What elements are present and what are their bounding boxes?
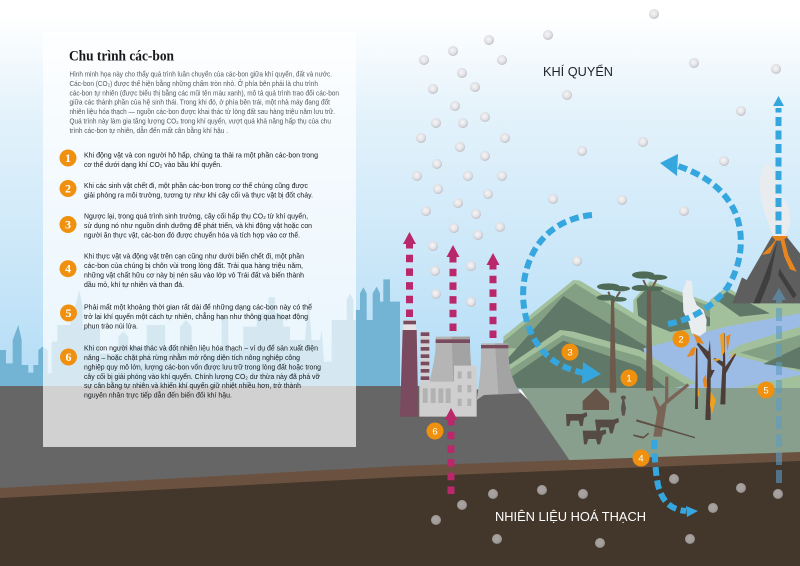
step 2: Khi các sinh vật chết đi, một phần các-bon trong cơ thể chúng cũng được: [84, 181, 308, 190]
step 1: 1: [65, 151, 71, 165]
tree right: [632, 271, 667, 391]
step 5: [60, 302, 312, 330]
magenta emission arrow 2: [446, 245, 460, 331]
scene badges: [426, 330, 774, 466]
intro paragraph: trình các-bon tự nhiên, dẫn đến mất cân bằng khí hậu .: [70, 126, 228, 135]
step 5: Phải mất một khoảng thời gian rất dài để những dạng các-bon này có thể: [84, 302, 312, 312]
cooling tower 1: [429, 337, 473, 383]
trees, house, people and animals: [566, 271, 737, 444]
sky background: [0, 0, 800, 390]
brown soil strip: [0, 452, 800, 505]
cows: [566, 412, 619, 444]
step 1: Khi động vật và con người hô hấp, chúng ta thải ra một phần các-bon trong: [84, 150, 318, 160]
step 6: 6: [66, 350, 72, 364]
badge 3: [562, 344, 578, 360]
volcano smoke: [759, 163, 790, 238]
green valley ground: [520, 388, 800, 470]
step 6: nghiệp quy mô lớn, lượng các-bon vốn được lưu trữ trong lòng đất hoặc trong: [84, 362, 321, 372]
blue arrow 2: respiration and combustion: [660, 154, 741, 324]
city skyline: [0, 279, 400, 387]
power plant building: [419, 366, 477, 417]
badge 6: 6: [432, 426, 438, 438]
step 6: [60, 344, 321, 400]
step 5: 5: [66, 306, 72, 320]
step 1: cơ thể dưới dạng khí CO₂ vào bầu khí quyển.: [84, 160, 222, 169]
atmosphere label: KHÍ QUYỂN: [543, 64, 613, 79]
intro paragraph: Hình minh họa này cho thấy quá trình luân chuyển của các-bon giữa khí quyển, đất và nước.: [70, 70, 332, 78]
step 6: Khi con người khai thác và đốt nhiên liệu hóa thạch – ví dụ để sản xuất điện: [84, 344, 318, 352]
step 3: sử dụng nó như nguồn dinh dưỡng để phát triển, và khi động vật hoặc con: [84, 221, 312, 230]
burnt trees: [695, 333, 736, 420]
blue arrow 3: photosynthesis: [523, 215, 601, 384]
person: [621, 396, 626, 416]
intro paragraph: Các-bon (CO₂) được thể hiện bằng những chấm tròn nhỏ. Ở phía bên phải là chu trình: [70, 79, 318, 88]
tall chimney: [400, 320, 418, 417]
intro paragraph: giữa các thành phần của hệ sinh thái. Trong khi đó, ở phía bên trái, một nhà máy đang đốt: [70, 98, 331, 107]
step 4: dầu mỏ, khí tự nhiên và than đá.: [84, 280, 184, 289]
step 4: các-bon của chúng bị chôn vùi trong lòng đất. Trải qua hàng triệu năm,: [84, 261, 303, 270]
step 6: năng – hoặc chặt phá rừng nhằm mở rộng diện tích nông nghiệp công: [84, 353, 300, 362]
magenta underground arrow: [444, 408, 458, 494]
text panel: [43, 32, 356, 447]
intro paragraph: các-bon tự nhiên (được biểu thị bằng các mũi tên màu xanh), mô tả quá trình trao đổi các-bon: [70, 88, 339, 97]
badge 3: 3: [567, 348, 573, 358]
striped chimney: [421, 332, 429, 382]
badge 2: 2: [678, 334, 684, 346]
blue arrow 4: burial: [654, 440, 698, 517]
tree left: [597, 283, 630, 393]
step 6: cây cối bị giải phóng vào khí quyển. Chính lượng CO₂ dư thừa này đã phá vỡ: [84, 372, 320, 381]
step 4: những vật chất hữu cơ này bị nén sâu vào lớp vỏ Trái đất và biến thành: [84, 270, 304, 280]
step 6: nguyên nhân trực tiếp dẫn đến biến đổi khí hậu.: [84, 390, 232, 400]
step 4: Khi thực vật và động vật trên cạn cũng như dưới biển chết đi, một phần: [84, 252, 304, 260]
intro paragraph: [70, 70, 339, 135]
badge 4: [632, 450, 650, 466]
flames: [687, 332, 737, 415]
step 3: Ngược lại, trong quá trình sinh trưởng, cây cối hấp thụ CO₂ từ khí quyển,: [84, 212, 308, 220]
lower arrow: fossil carbon rising, arrow 5: [772, 288, 786, 483]
step 1: [60, 150, 318, 169]
step 3: [60, 212, 312, 240]
underground fossil carbon dots: [431, 474, 783, 548]
mountains and river: [503, 280, 800, 388]
step 5: phun trào núi lửa.: [84, 322, 138, 330]
badge 2: [672, 330, 690, 348]
step 2: 2: [65, 182, 71, 196]
cooling tower 2: [477, 343, 521, 400]
panel title: Chu trình các-bon: [69, 48, 175, 64]
fire smoke: [683, 280, 707, 336]
step 3: 3: [65, 218, 71, 232]
badge 6: [426, 422, 444, 440]
badge 1: 1: [626, 374, 632, 384]
step 3: người ăn thực vật, các-bon đó được chuyển hóa và tích hợp vào cơ thể.: [84, 230, 300, 240]
house: [583, 388, 609, 410]
step 5: trở lại khí quyển một cách tự nhiên, chẳng hạn như thông qua hoạt động: [84, 312, 308, 321]
intro paragraph: nhiên liệu hóa thạch — nguồn các-bon được khai thác từ lòng đất sau hàng triệu năm lưu trữ.: [70, 107, 335, 116]
badge 5: 5: [763, 386, 769, 396]
badge 1: [620, 370, 638, 386]
atmosphere CO2 dots: [412, 9, 781, 307]
step 6: sự cân bằng tự nhiên và khiến khí quyển giữ nhiệt nhiều hơn, trở thành: [84, 381, 301, 390]
magenta emission arrow 1: [403, 232, 416, 317]
fossil fuel label: NHIÊN LIỆU HOÁ THẠCH: [495, 509, 646, 524]
badge 4: 4: [638, 454, 644, 464]
upper arrow: volcanic emission: [773, 96, 784, 234]
step 4: 4: [65, 262, 71, 276]
step 2: giải phóng ra môi trường, tương tự như khi cây cối và thực vật bị đốt cháy.: [84, 190, 313, 200]
dark underground: [0, 461, 800, 566]
step 2: [60, 180, 313, 200]
volcano: [732, 236, 800, 303]
magenta emission arrow 3: [486, 253, 500, 338]
badge 5: [758, 382, 774, 398]
factory: [400, 320, 521, 417]
step 4: [60, 252, 304, 289]
dead tree: [633, 377, 695, 439]
gray industrial ground: [0, 386, 600, 505]
intro paragraph: Quá trình này làm gia tăng lượng CO₂ trong khí quyển, vượt quá khả năng hấp thụ của chu: [70, 116, 331, 125]
